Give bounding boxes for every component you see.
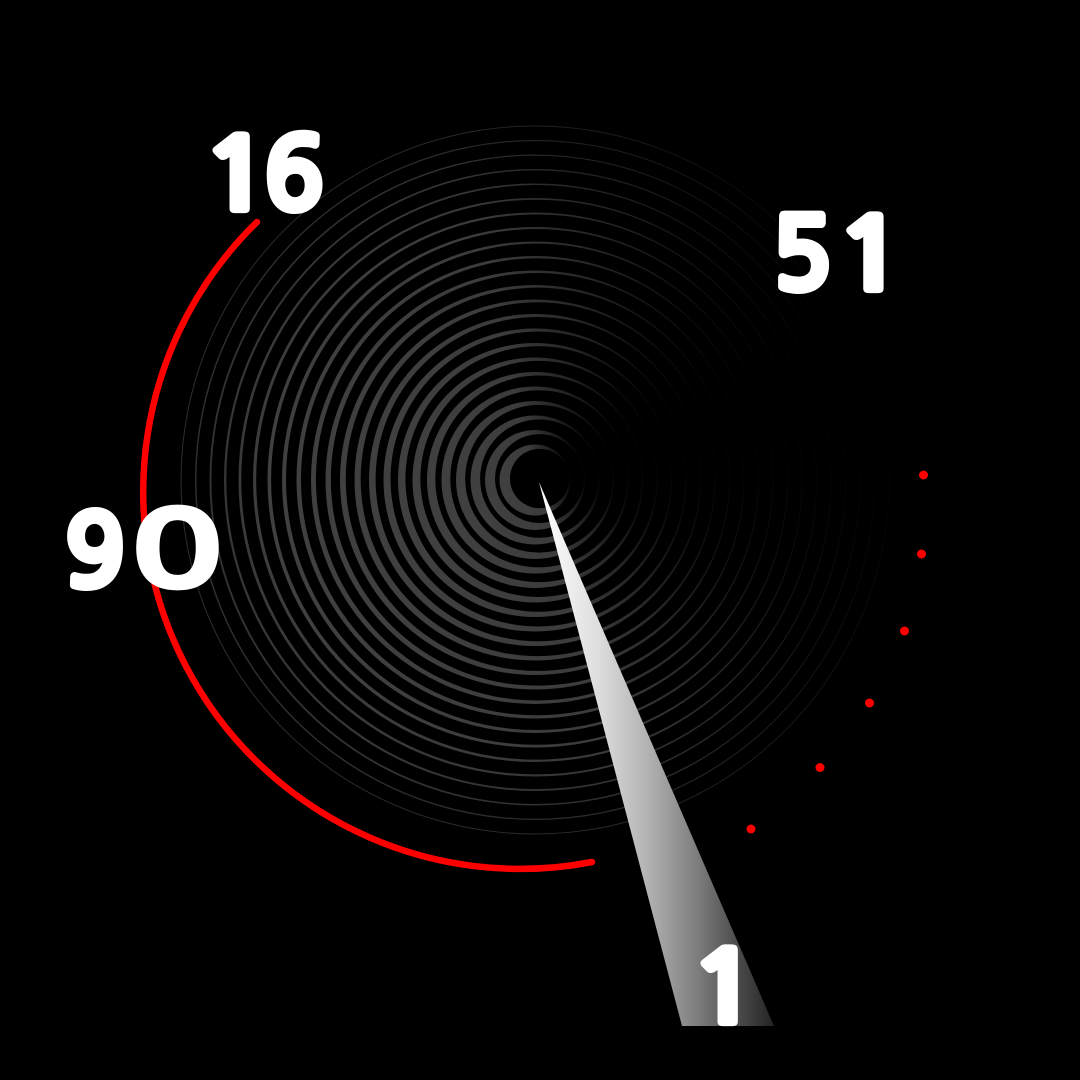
concentric fading rings: [180, 126, 890, 834]
number 90: 9: [65, 504, 125, 602]
red progress arc: [143, 222, 592, 869]
number 16: 6: [264, 126, 324, 224]
red tick dots: [746, 470, 928, 834]
number 51: 1: [835, 207, 907, 305]
number 1: 1: [689, 940, 761, 1038]
number 16: [201, 126, 324, 225]
number 90: 0: [131, 498, 223, 604]
number 90: [65, 498, 223, 604]
needle wedge: [539, 482, 774, 1026]
number 51: [772, 206, 907, 305]
number 51: 5: [772, 206, 832, 304]
number 16: 1: [201, 127, 273, 225]
